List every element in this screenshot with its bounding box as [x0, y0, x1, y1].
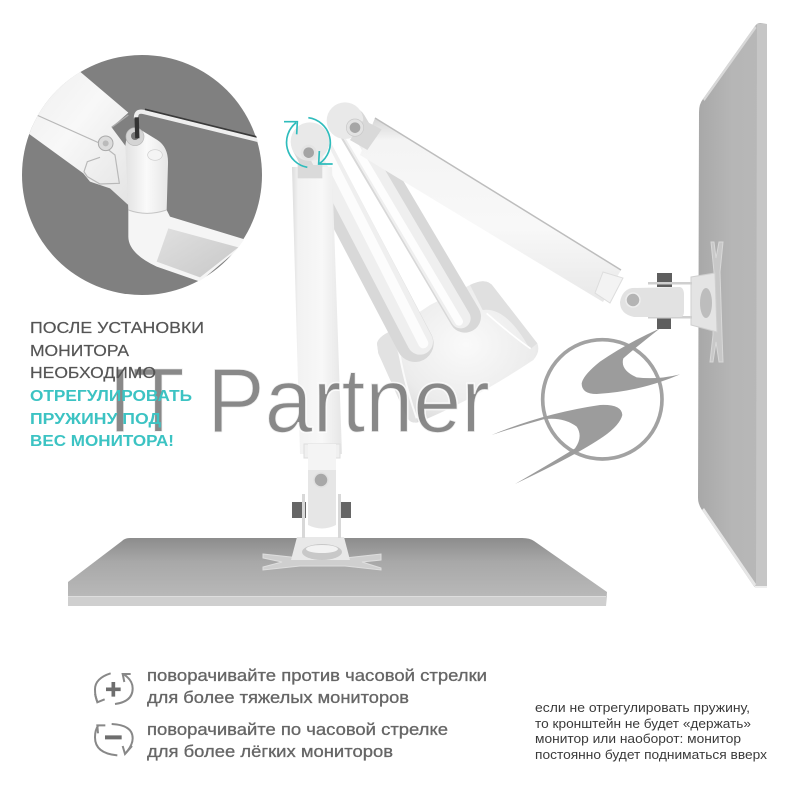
icon: teal rotation arrows	[284, 118, 333, 167]
monitor: side view on right	[698, 23, 767, 588]
arm: vertical left segment	[292, 167, 342, 454]
text: clockwise instruction	[147, 721, 448, 761]
vesa plate	[710, 242, 723, 362]
tube: right	[343, 123, 465, 322]
text: counter-clockwise instruction: для более тяжелых мониторов	[147, 689, 409, 707]
foot of gas spring	[377, 281, 538, 423]
joint: upper head with screw	[327, 102, 382, 150]
arm: upper right segment	[360, 118, 621, 302]
icon: rotate clockwise minus	[95, 724, 133, 755]
bracket	[691, 273, 717, 332]
text: side note: монитор или наоборот: монитор	[535, 731, 741, 746]
text: counter-clockwise instruction: поворачивайте против часовой стрелки	[147, 667, 487, 685]
text: clockwise instruction: поворачивайте по часовой стрелке	[147, 721, 448, 739]
heading dark lines: МОНИТОРА	[30, 343, 130, 360]
joint: monitor swivel bracket	[595, 242, 723, 362]
text: clockwise instruction: для более лёгких мониторов	[147, 743, 393, 761]
panel: inset close-up of hex key adjustment	[13, 55, 262, 295]
fork plates	[648, 282, 692, 318]
heading dark lines: ПОСЛЕ УСТАНОВКИ	[30, 320, 204, 337]
desk plate: horizontal surface at bottom	[68, 538, 607, 606]
inset: lower elbow of base arm	[128, 210, 247, 282]
logo: S emblem in circle	[492, 328, 680, 484]
text: side note: то кронштейн не будет «держать»	[535, 716, 751, 731]
inset: upper arm segment	[29, 72, 128, 204]
heading teal lines: ВЕС МОНИТОРА!	[30, 433, 174, 450]
text: counter-clockwise instruction	[147, 667, 487, 707]
swivel link	[304, 444, 340, 528]
fork plates	[302, 494, 341, 538]
spring tubes between arms	[310, 123, 465, 343]
joint: left head with screw and teal rotation arrows	[284, 118, 333, 178]
link body	[595, 272, 684, 317]
joint head	[291, 122, 329, 178]
heading dark lines: НЕОБХОДИМО	[30, 365, 156, 382]
mounting plate cross	[263, 554, 381, 570]
text: side note	[535, 700, 768, 762]
heading dark lines	[30, 320, 204, 382]
heading teal lines: ПРУЖИНУ ПОД	[30, 411, 161, 428]
heading teal lines	[30, 388, 192, 450]
text: side note: если не отрегулировать пружину,	[535, 700, 750, 715]
side nuts	[292, 502, 351, 518]
inset: hex key	[136, 109, 258, 140]
heading teal lines: ОТРЕГУЛИРОВАТЬ	[30, 388, 192, 405]
joint: lower swivel mount	[263, 444, 381, 570]
watermark: IT Partner: IT Partner	[108, 350, 490, 452]
icon: rotate counter-clockwise plus	[95, 673, 133, 704]
bolts	[657, 273, 672, 329]
heading: warning text	[30, 320, 204, 450]
mount base	[291, 537, 350, 560]
tube: left	[310, 143, 423, 343]
text: side note: постоянно будет подниматься вверх	[535, 747, 768, 762]
inset: vertical post	[125, 128, 168, 213]
